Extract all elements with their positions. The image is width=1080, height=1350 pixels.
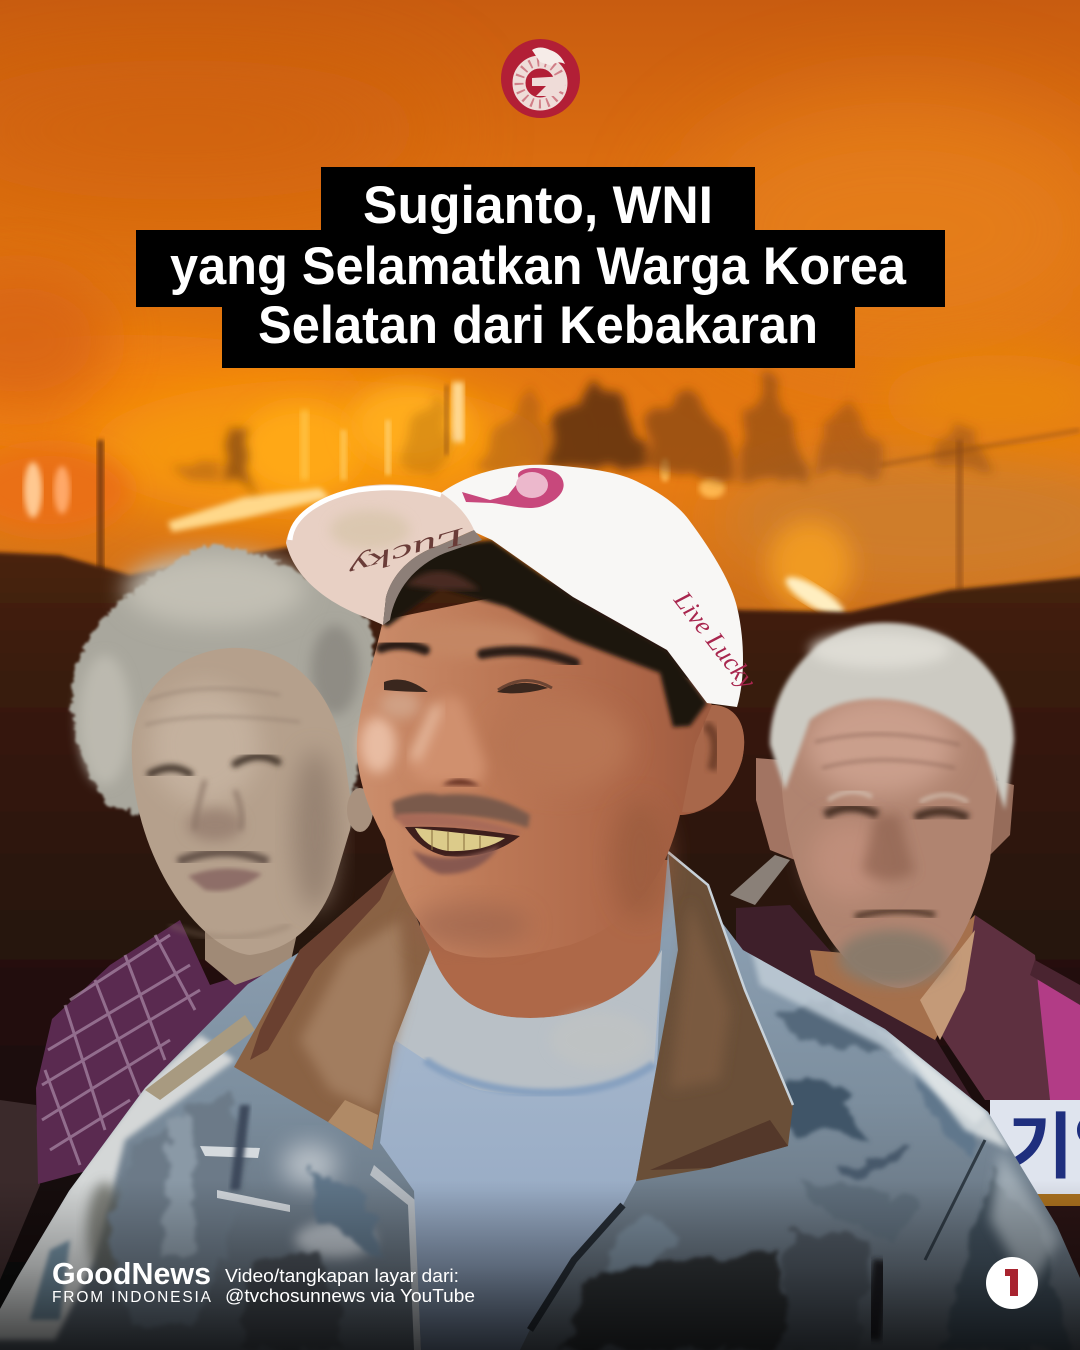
man neck and chest <box>810 915 975 1040</box>
background: forest fire and tree line <box>0 372 1080 623</box>
man clothes: vest, shirt and magenta panel <box>730 855 1080 1120</box>
background: dark ground and rooftop <box>0 545 1080 1350</box>
brown arm behind the woman <box>0 1100 40 1280</box>
cap red signature: Live Lucky <box>668 585 762 695</box>
jacket left pocket flaps <box>145 1015 421 1350</box>
logo badge <box>501 39 580 118</box>
jacket left panel camo <box>110 1090 385 1350</box>
title: Selatan dari Kebakaran <box>258 296 818 355</box>
jacket right sleeve highlights <box>750 945 1060 1340</box>
title: Sugianto, WNI <box>363 176 713 235</box>
title <box>136 167 945 368</box>
ear <box>682 705 744 812</box>
woman neck <box>205 920 300 985</box>
head and face <box>357 590 744 958</box>
man ears <box>756 758 1014 860</box>
jacket left panel light highlights <box>0 1035 375 1340</box>
man grey hair <box>770 623 1014 810</box>
man face <box>782 668 997 988</box>
elderly woman on the left <box>0 545 375 1280</box>
source credit <box>225 1266 475 1306</box>
cap bill <box>286 484 482 625</box>
woman plaid blouse <box>36 920 290 1184</box>
cap crown <box>441 465 743 707</box>
title: yang Selamatkan Warga Korea <box>170 237 906 296</box>
woman face <box>132 648 352 955</box>
Korean sign <box>990 1100 1080 1306</box>
source credit: Video/tangkapan layar dari: <box>225 1266 459 1286</box>
main figure: Sugianto <box>0 465 1080 1350</box>
hair <box>381 540 707 727</box>
woman hair <box>72 545 375 830</box>
jacket right panel camo <box>560 1000 1070 1350</box>
GoodNews from Indonesia wordmark: GoodNews <box>52 1256 211 1291</box>
moustache and smile <box>392 794 530 874</box>
woman ear <box>347 788 373 832</box>
GoodNews from Indonesia wordmark <box>52 1256 212 1306</box>
bottom dark gradient <box>0 1180 1080 1350</box>
eyebrows and eyes <box>381 644 575 693</box>
page number badge <box>986 1257 1038 1309</box>
nose <box>408 695 485 786</box>
neck <box>420 860 680 1030</box>
GoodNews from Indonesia wordmark: FROM INDONESIA <box>52 1289 212 1306</box>
elderly man on the right <box>730 623 1080 1306</box>
jacket collar <box>234 852 793 1181</box>
sweater <box>380 950 662 1350</box>
white cap <box>286 465 762 707</box>
source credit: @tvchosunnews via YouTube <box>225 1286 475 1306</box>
cap underbrim text: Lucky <box>344 522 470 580</box>
jacket <box>0 852 1080 1350</box>
background: burning sky <box>0 0 1080 640</box>
cap pink embroidery <box>462 468 564 508</box>
